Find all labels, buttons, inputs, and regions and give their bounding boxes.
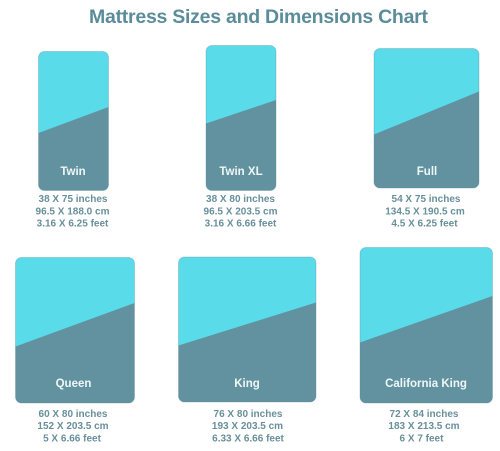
label: Twin XL: Twin XL xyxy=(219,166,263,178)
title: Mattress Sizes and Dimensions Chart xyxy=(89,6,428,28)
panel: California King xyxy=(360,248,492,444)
dimensions: California King: 6 X 7 feet xyxy=(400,434,444,444)
dimensions: California King xyxy=(388,409,460,444)
label: King: King xyxy=(234,378,260,390)
mattress: California King xyxy=(360,248,492,403)
mattress: King xyxy=(178,257,316,402)
dimensions: Twin: 38 X 75 inches xyxy=(39,194,108,205)
panel: Twin XL xyxy=(204,46,278,230)
dimensions: Queen: 60 X 80 inches xyxy=(39,409,108,420)
label: Queen: Queen xyxy=(56,378,91,390)
dimensions: Twin XL: 38 X 80 inches xyxy=(206,194,275,205)
dimensions: Queen: 152 X 203.5 cm xyxy=(37,421,109,432)
mattress: Queen xyxy=(16,258,134,403)
panel: King xyxy=(178,257,316,444)
mattress: Twin xyxy=(38,52,108,190)
dimensions: California King: 72 X 84 inches xyxy=(390,409,459,420)
label: California King: California King xyxy=(385,378,467,390)
dimensions: King: 6.33 X 6.66 feet xyxy=(212,434,285,444)
label: Twin: Twin xyxy=(60,166,86,178)
dimensions: Full: 134.5 X 190.5 cm xyxy=(385,206,465,218)
dimensions: Queen xyxy=(37,409,109,444)
dimensions: Queen: 5 X 6.66 feet xyxy=(43,434,102,444)
dimensions: King: 76 X 80 inches xyxy=(214,409,283,420)
mattress: Twin XL xyxy=(206,46,276,190)
dimensions: Twin xyxy=(36,194,110,230)
dimensions: Full: 54 X 75 inches xyxy=(392,194,461,205)
dimensions: Twin XL xyxy=(204,194,278,230)
mattress: Full xyxy=(374,48,479,188)
panel: Queen xyxy=(16,258,134,444)
dimensions: Twin XL: 3.16 X 6.66 feet xyxy=(205,218,277,230)
panel: Full xyxy=(374,48,479,230)
panel: Twin xyxy=(36,52,110,230)
dimensions: Twin XL: 96.5 X 203.5 cm xyxy=(204,206,278,218)
dimensions: California King: 183 X 213.5 cm xyxy=(388,421,460,432)
dimensions: King: 193 X 203.5 cm xyxy=(212,421,283,432)
dimensions: Full: 4.5 X 6.25 feet xyxy=(391,218,458,230)
dimensions: Twin: 3.16 X 6.25 feet xyxy=(37,218,109,230)
dimensions: Full xyxy=(385,194,465,230)
dimensions: King xyxy=(212,409,285,444)
dimensions: Twin: 96.5 X 188.0 cm xyxy=(36,206,110,218)
label: Full: Full xyxy=(417,166,437,178)
